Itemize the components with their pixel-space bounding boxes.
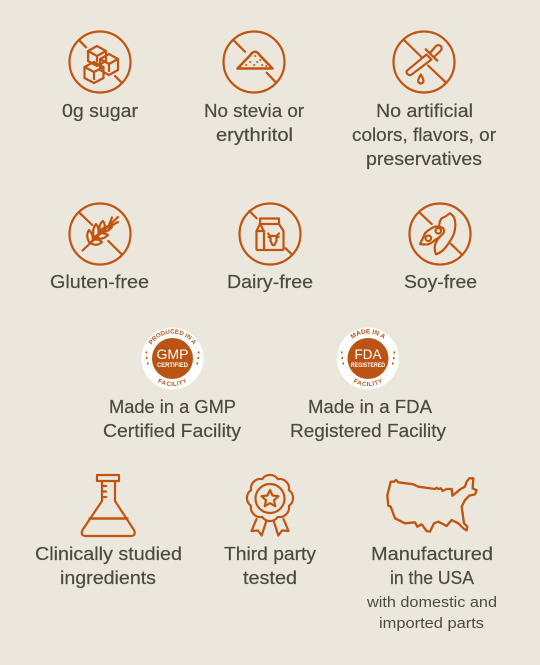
label: Third party tested: tested (243, 568, 297, 588)
badge: GMP certified: GMP (156, 346, 188, 362)
label: Gluten-free: Gluten-free (50, 272, 149, 292)
label: No stevia or erythritol (204, 101, 304, 145)
label: No stevia or erythritol: No stevia or (204, 101, 304, 121)
icon: no stevia (224, 32, 284, 92)
badge: FDA registered: REGISTERED (351, 362, 385, 369)
icon: flask (82, 475, 135, 536)
icon: USA map outline (387, 478, 477, 532)
label: Dairy-free: Dairy-free (227, 272, 313, 292)
label: Clinically studied ingredients: Clinically studied (35, 544, 182, 564)
label: 0g sugar: 0g sugar (62, 101, 138, 121)
label: Manufactured in the USA: Manufactured (371, 544, 493, 564)
label: Made in a GMP Certified Facility (103, 397, 241, 441)
badge: GMP certified (142, 328, 204, 390)
badge: FDA registered: FACILITY (354, 378, 382, 386)
label: No artificial colors, flavors, or preservatives: colors, flavors, or (352, 125, 496, 145)
label: Third party tested (224, 544, 316, 588)
note: with domestic and imported parts: imported parts (379, 615, 484, 632)
label: Made in a FDA Registered Facility: Made in a FDA (308, 397, 432, 417)
note: with domestic and imported parts: with domestic and (366, 594, 497, 611)
badge: GMP certified: PRODUCED IN A (148, 329, 196, 345)
icon: no soy beans (410, 204, 470, 264)
badge: GMP certified: FACILITY (158, 378, 186, 386)
badge: FDA registered: MADE IN A (350, 329, 385, 339)
label: No artificial colors, flavors, or preservatives: preservatives (366, 149, 482, 169)
label: Made in a FDA Registered Facility: Registered Facility (290, 421, 446, 441)
label: No artificial colors, flavors, or preservatives (352, 101, 496, 169)
label: Clinically studied ingredients: ingredients (60, 568, 156, 588)
label: Soy-free: Soy-free (404, 272, 477, 292)
badge: GMP certified: CERTIFIED (157, 362, 188, 369)
badge: FDA registered (337, 328, 399, 390)
label: Clinically studied ingredients (35, 544, 182, 588)
label: No stevia or erythritol: erythritol (216, 125, 293, 145)
label: Manufactured in the USA: in the USA (390, 568, 474, 588)
label: Made in a FDA Registered Facility (290, 397, 446, 441)
label: Manufactured in the USA (371, 544, 493, 588)
label: No artificial colors, flavors, or preservatives: No artificial (376, 101, 473, 121)
icon: no sugar cubes (70, 32, 130, 92)
badge: FDA registered: FDA (354, 346, 382, 362)
note: with domestic and imported parts (366, 594, 497, 632)
icon: no artificial dropper (394, 32, 454, 92)
label: Made in a GMP Certified Facility: Made in a GMP (109, 397, 236, 417)
icon: no dairy carton (240, 204, 300, 264)
icon: award ribbon (247, 475, 293, 536)
icon: no gluten wheat (70, 204, 130, 264)
label: Third party tested: Third party (224, 544, 316, 564)
label: Made in a GMP Certified Facility: Certified Facility (103, 421, 241, 441)
